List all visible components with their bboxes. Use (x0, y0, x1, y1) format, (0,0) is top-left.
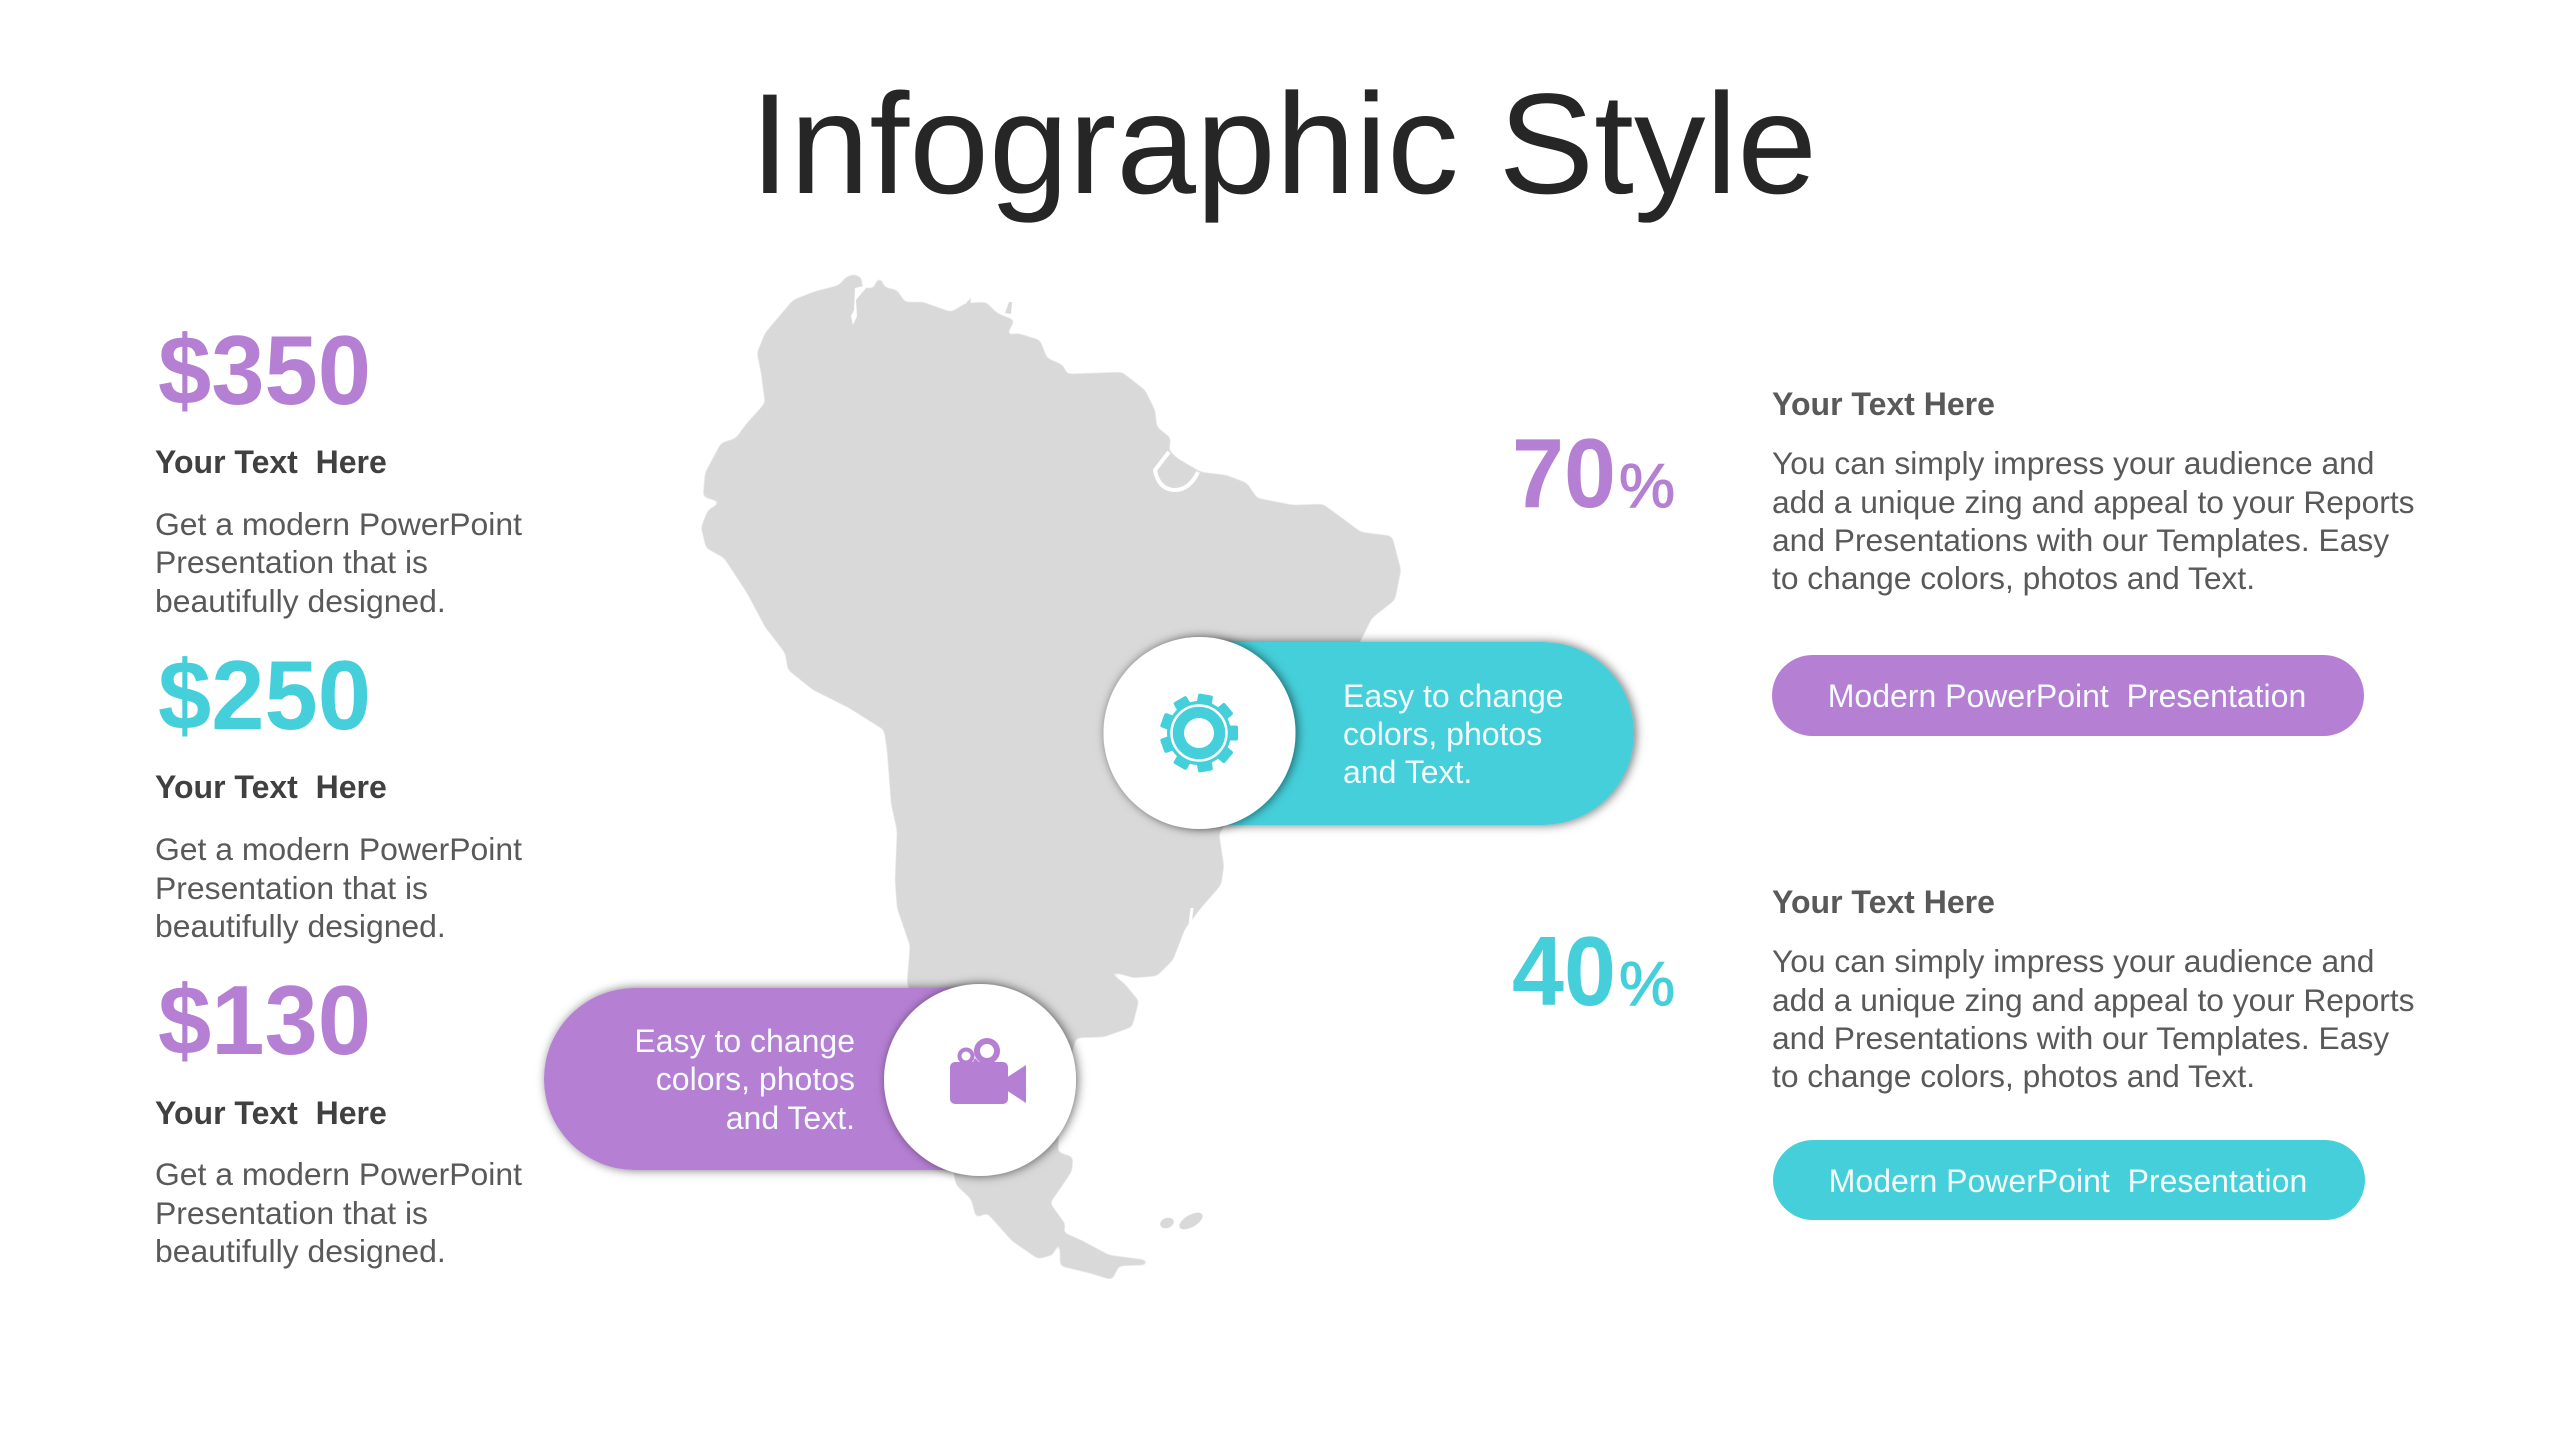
stat: 70%: 70 (1512, 418, 1616, 528)
map: South America (701, 274, 1401, 1280)
price block: $250: Get a modern PowerPoint (155, 831, 522, 867)
price block: $130: beautifully designed. (155, 1233, 446, 1269)
stat: 70%: % (1619, 452, 1675, 521)
price block: $350: Presentation that is (155, 544, 428, 580)
price block: $350: $350 (158, 315, 371, 425)
text block: lower right: to change colors, photos and Text. (1772, 1058, 2255, 1094)
callout: teal pill with gear (1104, 637, 1634, 829)
icon: video camera (950, 1041, 1026, 1104)
callout: purple pill with camera (544, 984, 1076, 1176)
callout: purple pill with camera: and Text. (726, 1100, 855, 1136)
text block: upper right (1772, 386, 2415, 596)
price block: $250: Your Text Here (155, 769, 387, 805)
price block: $250: beautifully designed. (155, 908, 446, 944)
icon: gear (1160, 693, 1238, 773)
text block: lower right: Your Text Here (1772, 884, 1995, 920)
callout: teal pill with gear: and Text. (1343, 754, 1472, 790)
button: purple (1772, 655, 2364, 736)
price block: $130: Get a modern PowerPoint (155, 1156, 522, 1192)
text block: lower right: add a unique zing and appeal to your Reports (1772, 982, 2415, 1018)
title: Infographic Style (750, 65, 1817, 224)
price block: $350: beautifully designed. (155, 583, 446, 619)
callout: purple pill with camera: colors, photos (656, 1061, 855, 1097)
callout: purple pill with camera: Easy to change (634, 1023, 855, 1059)
price block: $250: $250 (158, 640, 371, 750)
button: teal (1773, 1140, 2365, 1220)
gulf notch (851, 286, 866, 325)
callout: teal pill with gear: Easy to change (1343, 678, 1564, 714)
price block: $350: Get a modern PowerPoint (155, 506, 522, 542)
price block: $130: $130 (158, 965, 371, 1075)
button: purple: Modern PowerPoint Presentation (1828, 678, 2306, 714)
text block: upper right: and Presentations with our Templates. Easy (1772, 522, 2389, 558)
text block: lower right: and Presentations with our Templates. Easy (1772, 1020, 2389, 1056)
text block: lower right (1772, 884, 2415, 1094)
price block: $350: Your Text Here (155, 444, 387, 480)
price block: $130: Your Text Here (155, 1095, 387, 1131)
stat: 40% (1512, 916, 1675, 1026)
price block: $250 (155, 640, 522, 944)
price block: $250: Presentation that is (155, 870, 428, 906)
price block: $130: Presentation that is (155, 1195, 428, 1231)
stat: 70% (1512, 418, 1675, 528)
text block: upper right: to change colors, photos and Text. (1772, 560, 2255, 596)
stat: 40%: 40 (1512, 916, 1616, 1026)
text block: upper right: add a unique zing and appeal to your Reports (1772, 484, 2415, 520)
text block: upper right: Your Text Here (1772, 386, 1995, 422)
Marajo channel (1155, 452, 1198, 490)
price block: $130 (155, 965, 522, 1269)
text block: lower right: You can simply impress your audience and (1772, 943, 2374, 979)
callout: teal pill with gear: colors, photos (1343, 716, 1542, 752)
button: teal: Modern PowerPoint Presentation (1829, 1163, 2307, 1199)
text block: upper right: You can simply impress your audience and (1772, 445, 2374, 481)
stat: 40%: % (1619, 950, 1675, 1019)
price block: $350 (155, 315, 522, 619)
